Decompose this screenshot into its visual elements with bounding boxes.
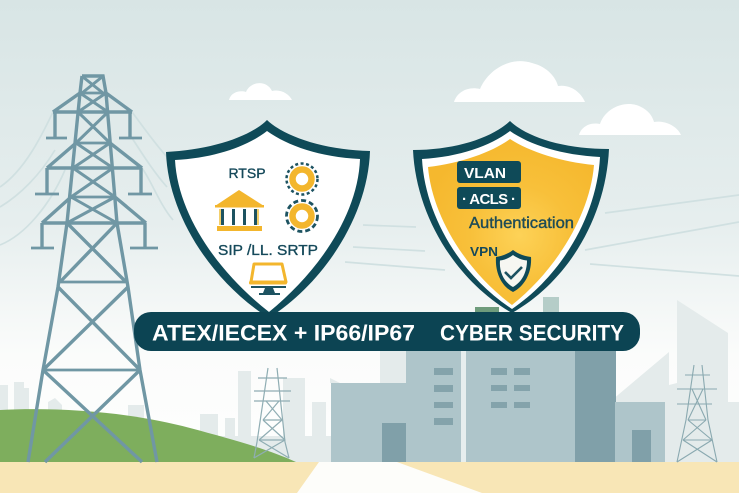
panel: right shield: [413, 121, 609, 313]
label: ACLS: · ACLS ·: [462, 191, 516, 208]
label: RTSP: RTSP: [228, 165, 266, 181]
green hill: [0, 409, 296, 462]
label: VPN: VPN: [470, 244, 498, 259]
distant skyline: [0, 300, 739, 462]
icon: check shield: [496, 250, 531, 292]
banner: [134, 312, 640, 351]
main transmission tower: [28, 76, 158, 462]
icon: gear bottom: [286, 200, 318, 232]
icon: gear top: [286, 164, 318, 194]
label: VLAN: [457, 161, 521, 183]
far right tower: [677, 365, 717, 462]
clouds: [229, 61, 681, 135]
road: [297, 462, 482, 493]
ground: [0, 462, 739, 493]
banner text: ATEX: ATEX/IECEX + IP66/IP67: [152, 320, 415, 346]
small distant tower: [254, 368, 291, 458]
label: ACLS: [457, 187, 521, 209]
panel: left shield: [166, 120, 370, 318]
power lines: [0, 112, 739, 276]
icon: monitor: [249, 264, 287, 295]
icon: temple: [215, 190, 264, 231]
right shield frame: [413, 121, 609, 313]
label: Authentication: Authentication: [469, 215, 574, 232]
banner text: cyber security: CYBER SECURITY: [440, 320, 624, 346]
label: VLAN: VLAN: [464, 165, 506, 182]
label: SIP / SRTP: SIP /LL. SRTP: [218, 242, 318, 259]
factory building: [331, 297, 665, 462]
left shield frame: [166, 120, 370, 318]
